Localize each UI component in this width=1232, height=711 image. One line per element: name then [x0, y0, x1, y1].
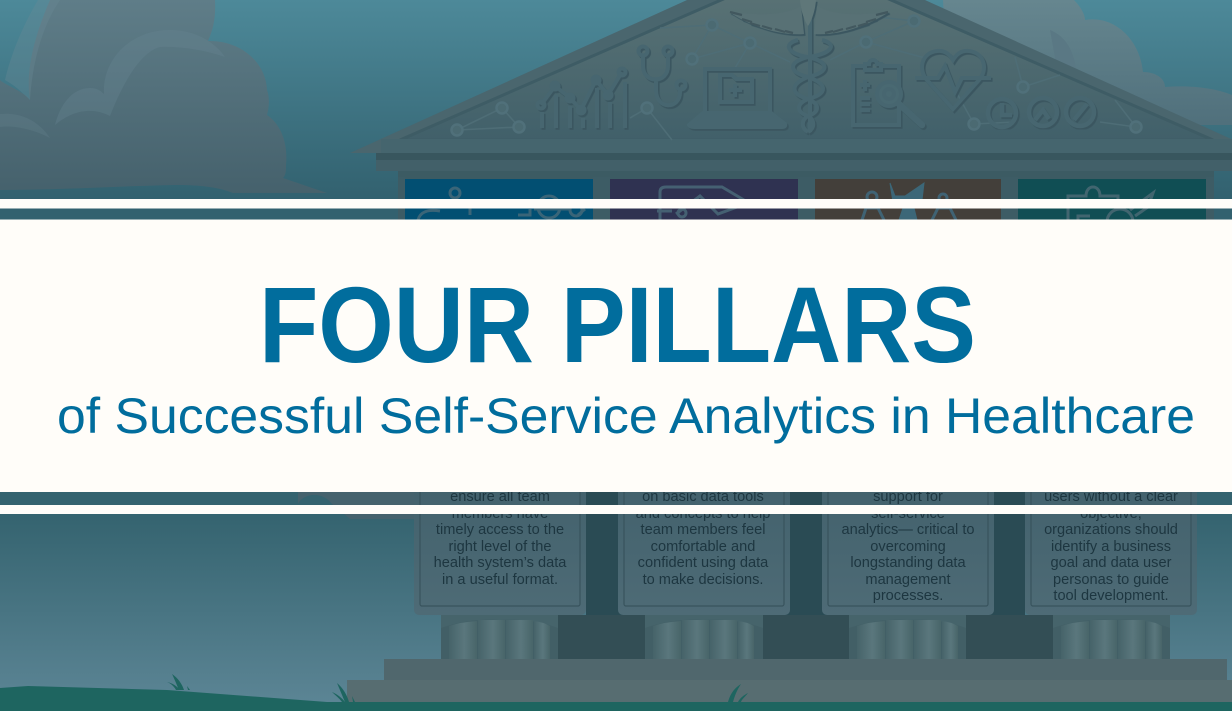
pillar text: access: right level of the	[448, 539, 552, 555]
icon: stethoscope	[638, 46, 686, 105]
pillar text: objective: personas to guide	[1053, 572, 1169, 588]
pillar text: support: longstanding data	[850, 555, 966, 571]
title banner	[0, 220, 1232, 492]
pillar text: objective: goal and data user	[1051, 555, 1172, 571]
icon: grass tuft centre-left	[332, 683, 355, 702]
icon: heart with pulse	[915, 51, 991, 109]
bottom white stripe	[0, 505, 1232, 514]
pillar text: support: analytics— critical to	[841, 522, 975, 538]
plaque 3	[822, 480, 994, 615]
pillar text: access: members have	[452, 506, 548, 522]
pillar text: access: in a useful format.	[442, 572, 558, 588]
pillar text: objective: tool development.	[1053, 588, 1169, 604]
column 3	[849, 615, 966, 659]
pediment network nodes	[452, 16, 1142, 136]
panel: blue pillar	[405, 179, 593, 220]
pediment inner field	[400, 0, 1213, 140]
column 4	[1053, 615, 1170, 659]
pediment outer roof	[350, 0, 1232, 153]
pillar plaques	[414, 480, 1197, 615]
temple	[347, 0, 1232, 702]
column 1	[441, 615, 558, 659]
pediment network lines	[457, 15, 1136, 140]
pillar text: objective: organizations should	[1044, 522, 1178, 538]
icon: bar and line chart	[538, 68, 626, 128]
column 2	[645, 615, 763, 659]
icon: laptop	[689, 69, 785, 127]
pillar text: objective: identify a business	[1051, 539, 1171, 555]
plaque 2	[618, 480, 790, 615]
pillar text: support: self-service	[871, 506, 945, 522]
temple back wall	[586, 480, 1025, 616]
pillar text: objective: users without a clear	[1044, 489, 1178, 505]
entablature bands	[376, 153, 1232, 179]
pillar text: training: team members feel	[641, 522, 765, 538]
top white stripe	[0, 199, 1232, 208]
pillar text: support: support for	[873, 489, 943, 505]
panel: purple pillar	[610, 179, 798, 220]
pillar text: support: management	[865, 572, 951, 588]
title: FOUR PILLARS	[259, 264, 976, 385]
icon: grass tuft left	[167, 674, 190, 690]
pillar text: objective: objective,	[1080, 506, 1142, 522]
ground hill	[0, 686, 1232, 711]
pediment lower ledge	[381, 139, 1232, 153]
plaque 4	[1025, 480, 1197, 615]
icon: three gauges	[988, 98, 1094, 127]
icon: caduceus	[729, 0, 889, 132]
lower dark wall between columns	[558, 615, 1053, 659]
pillar text: training: comfortable and	[651, 539, 755, 555]
pillar text: access: timely access to the	[436, 522, 564, 538]
temple steps	[347, 659, 1232, 702]
plaque 1	[414, 480, 586, 615]
column capitals between panels	[398, 177, 1214, 222]
pillar text: support: overcoming	[870, 539, 946, 555]
cloud: left	[0, 0, 327, 193]
pillar text: access: health system’s data	[434, 555, 567, 571]
pillar text: training: to make decisions.	[643, 572, 763, 588]
subtitle: of Successful Self-Service Analytics in Healthcare	[57, 388, 1195, 444]
cloud: lower remnant under banner	[298, 492, 414, 519]
pillar text: training: confident using data	[638, 555, 769, 571]
pillar text: access: ensure all team	[450, 489, 550, 505]
pillar text: support: processes.	[873, 588, 943, 604]
pillar text: training: and concepts to help	[636, 506, 770, 522]
panel: brown pillar	[815, 179, 1001, 220]
column shafts	[441, 615, 1170, 659]
icon: clipboard with magnifier	[853, 60, 922, 125]
pillar text: training: on basic data tools	[642, 489, 764, 505]
panel: teal pillar	[1018, 179, 1206, 235]
icon: grass tuft right	[728, 684, 748, 702]
cloud: right, behind the temple	[943, 0, 1232, 125]
